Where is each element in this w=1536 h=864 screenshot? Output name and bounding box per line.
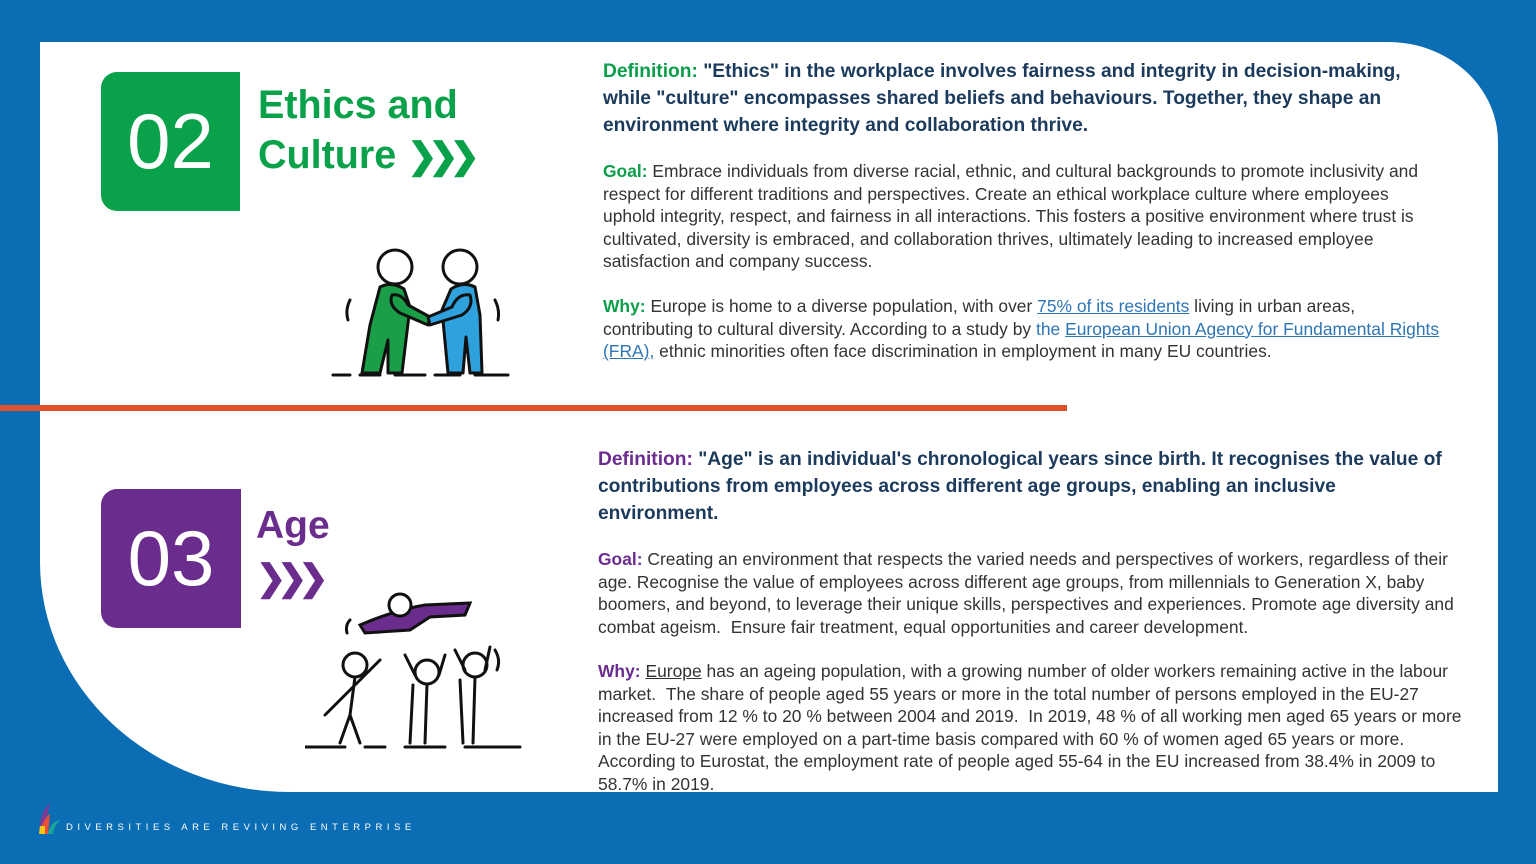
text block: ethics goal: satisfaction and company success. [603, 251, 872, 271]
heading: Ethics and Culture [258, 83, 476, 178]
text block: age why: 58.7% in 2019. [598, 774, 714, 794]
text block: ethics why: contributing to cultural diversity. According to a study by the European Union Agency for Fundamental Rights [603, 318, 1439, 338]
text block: age why: Why: Europe has an ageing population, with a growing number of older workers remaining active in the labour [598, 661, 1448, 681]
icon: handshake people [332, 248, 510, 376]
text block: ethics definition: while "culture" encompasses shared beliefs and behaviours. Together, they shape an [603, 88, 1381, 109]
text block: age why: increased from 12 % to 20 % between 2004 and 2019. In 2019, 48 % of all working men aged 65 years or more [598, 706, 1461, 726]
logo footer [39, 803, 416, 834]
icon: people celebrating [305, 592, 522, 748]
text block: ethics goal: respect for different traditions and perspectives. Create an ethical workplace culture where employees [603, 184, 1389, 204]
text block: age goal: Goal: Creating an environment that respects the varied needs and perspectives of workers, regardless of their [598, 549, 1448, 569]
heading: Age [256, 504, 330, 600]
text block: age definition [598, 449, 1442, 524]
divider orange line [0, 405, 1067, 411]
tagline: DIVERSITIES ARE REVIVING ENTERPRISE [66, 822, 416, 833]
text block: ethics why: Why: Europe is home to a diverse population, with over 75% of its residents living in urban areas, [603, 296, 1355, 316]
text block: age definition: contributions from employees across different age groups, enabling an inclusive [598, 476, 1336, 497]
heading: Ethics and Culture: Culture ❯❯❯ [258, 133, 471, 177]
text block: ethics goal: cultivated, diversity is embraced, and collaboration thrives, ultimately leading to increased employee [603, 228, 1374, 248]
badge 03 [101, 489, 241, 628]
text block: ethics goal: uphold integrity, respect, and fairness in all interactions. This fosters a positive environment where trust is [603, 206, 1414, 226]
text block: ethics why [603, 296, 1440, 361]
icon: logo [39, 803, 60, 834]
badge 02 [101, 72, 240, 211]
badge 03: 03 [128, 514, 214, 602]
text block: age why [598, 661, 1461, 794]
heading: Ethics and Culture: Ethics and [258, 83, 458, 127]
text block: age goal [598, 549, 1454, 636]
text block: ethics definition [603, 61, 1401, 136]
text block: age goal: age. Recognise the value of employees across different age groups, from millennials to Generation X, baby [598, 572, 1424, 592]
text block: age definition: environment. [598, 503, 718, 524]
heading: Age: Age [256, 504, 330, 547]
text block: age why: According to Eurostat, the employment rate of people aged 55-64 in the EU increased from 38.4% in 2009 to [598, 751, 1435, 771]
text block: age goal: combat ageism. Ensure fair treatment, equal opportunities and career development. [598, 616, 1248, 636]
text block: age why: market. The share of people aged 55 years or more in the total number of persons employed in the EU-27 [598, 684, 1419, 704]
text block: ethics goal [603, 161, 1418, 271]
text block: ethics definition: environment where integrity and collaboration thrive. [603, 115, 1088, 136]
text block: ethics definition: Definition: "Ethics" in the workplace involves fairness and integrity in decision-making, [603, 61, 1401, 82]
badge 02: 02 [127, 97, 214, 185]
text block: age definition: Definition: "Age" is an individual's chronological years since birth. It recognises the value of [598, 449, 1442, 470]
text block: age goal: boomers, and beyond, to leverage their unique skills, perspectives and experiences. Promote age diversity and [598, 594, 1454, 614]
heading: Age: ❯❯❯ [256, 557, 320, 598]
text block: ethics goal: Goal: Embrace individuals from diverse racial, ethnic, and cultural backgrounds to promote inclusivity and [603, 161, 1418, 181]
text block: age why: in the EU-27 were employed on a part-time basis compared with 60 % of women aged 65 years or more. [598, 728, 1404, 748]
text block: ethics why: (FRA), ethnic minorities often face discrimination in employment in many EU countries. [603, 341, 1272, 361]
